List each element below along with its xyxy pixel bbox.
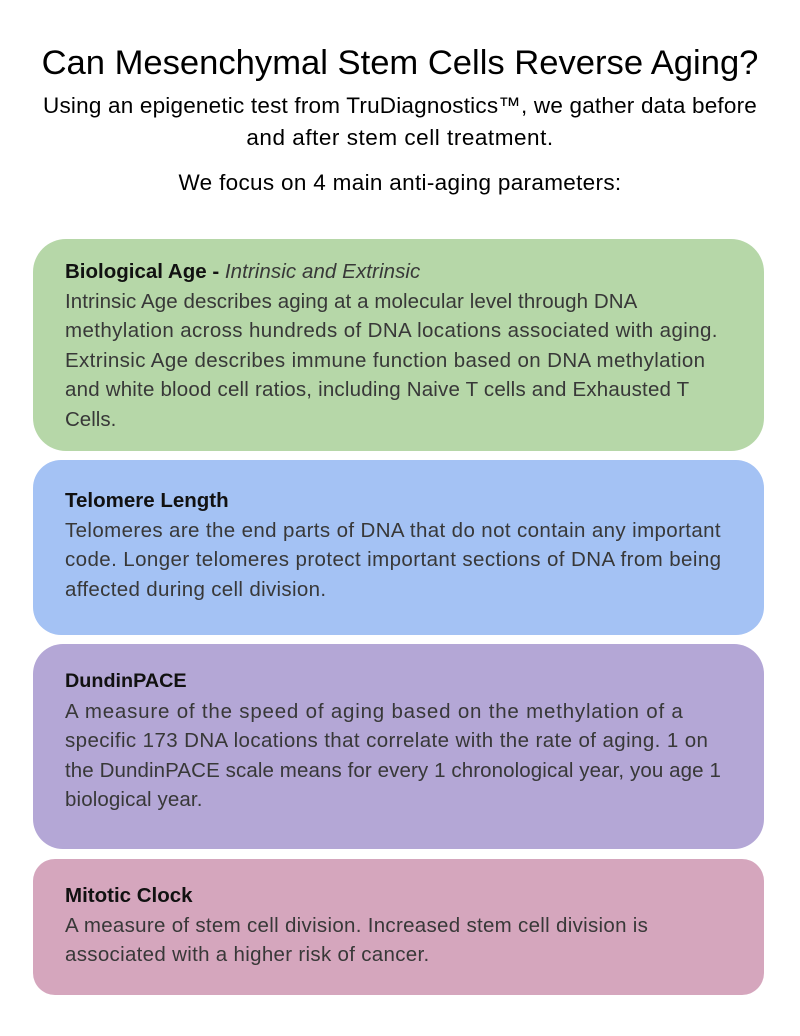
subtitle: and after stem cell treatment.	[246, 125, 554, 150]
mitotic clock text: Mitotic Clock	[65, 884, 193, 907]
biological age text: Intrinsic Age describes aging at a molecular level through DNA	[65, 290, 637, 313]
mitotic clock text: A measure of stem cell division. Increased stem cell division is	[65, 914, 648, 937]
dundinpace text: the DundinPACE scale means for every 1 chronological year, you age 1	[65, 759, 721, 782]
panel: telomere length	[33, 460, 764, 635]
biological age text: Cells.	[65, 408, 116, 431]
biological age text	[65, 260, 718, 431]
telomere length text: Telomere Length	[65, 489, 229, 512]
mitotic clock text: associated with a higher risk of cancer.	[65, 943, 430, 966]
dundinpace text: DundinPACE	[65, 670, 187, 692]
panel: dundinpace	[33, 644, 764, 849]
dundinpace text	[65, 670, 721, 811]
intro line: We focus on 4 main anti-aging parameters:	[179, 170, 621, 195]
subtitle: Using an epigenetic test from TruDiagnostics™, we gather data before	[43, 93, 757, 118]
mitotic clock text	[65, 884, 648, 966]
panel: biological age	[33, 239, 764, 451]
biological age text: methylation across hundreds of DNA locations associated with aging.	[65, 319, 718, 342]
title: Can Mesenchymal Stem Cells Reverse Aging?	[42, 44, 758, 82]
panel: mitotic clock	[33, 859, 764, 995]
dundinpace text: A measure of the speed of aging based on the methylation of a	[65, 700, 684, 723]
biological age text: and white blood cell ratios, including Naive T cells and Exhausted T	[65, 378, 689, 401]
biological age text: Extrinsic Age describes immune function based on DNA methylation	[65, 349, 705, 372]
telomere length text	[65, 489, 721, 601]
telomere length text: Telomeres are the end parts of DNA that do not contain any important	[65, 519, 721, 542]
dundinpace text: specific 173 DNA locations that correlate with the rate of aging. 1 on	[65, 729, 708, 752]
telomere length text: affected during cell division.	[65, 578, 326, 601]
telomere length text: code. Longer telomeres protect important sections of DNA from being	[65, 548, 721, 571]
subtitle	[43, 93, 757, 150]
biological age text: Biological Age - Intrinsic and Extrinsic	[65, 260, 420, 283]
dundinpace text: biological year.	[65, 788, 203, 811]
